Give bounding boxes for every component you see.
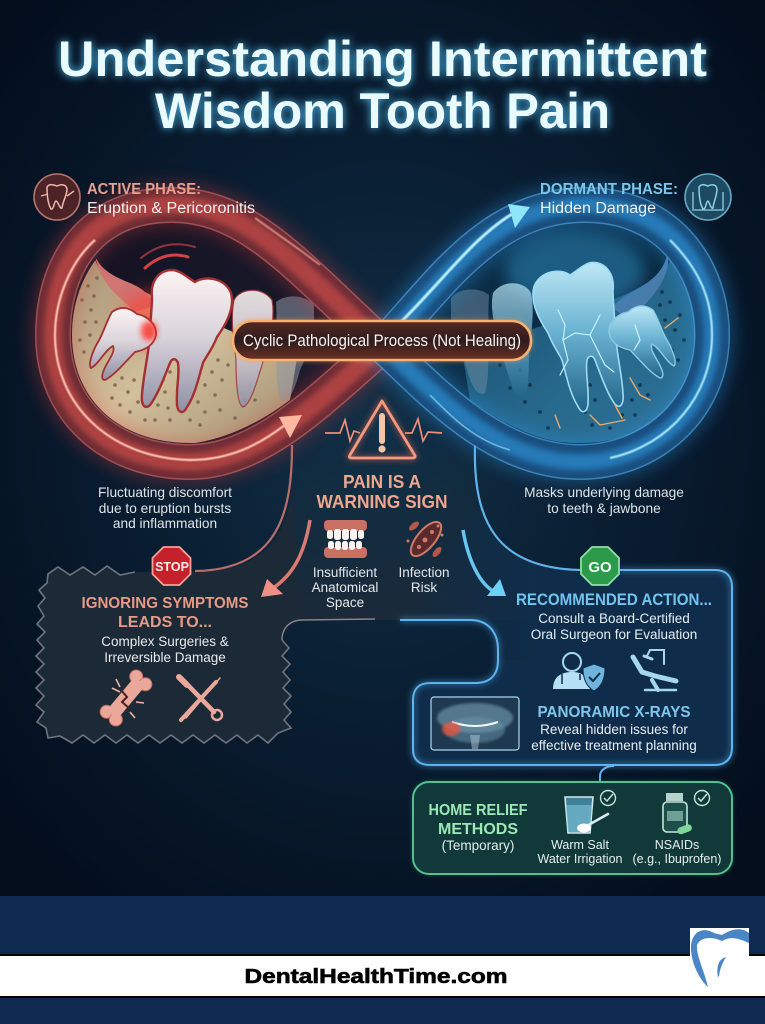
arrow: red loop	[279, 415, 302, 438]
arrow: red to panel	[261, 579, 283, 597]
text: active phase description: due to eruption bursts	[99, 501, 231, 516]
heading: recommended action: RECOMMENDED ACTION...	[516, 591, 712, 609]
header: dormant phase	[540, 174, 731, 220]
text: insufficient anatomical space	[312, 565, 378, 610]
tooth: second molar	[492, 283, 533, 400]
icon: dentures	[324, 520, 367, 558]
illustration: left teeth	[72, 223, 337, 443]
heading: ignoring symptoms: IGNORING SYMPTOMS	[82, 595, 249, 612]
illustration: right teeth	[436, 223, 695, 443]
header: active phase: Eruption & Pericoronitis	[87, 200, 255, 217]
cracks	[555, 310, 678, 428]
text: consult surgeon: Oral Surgeon for Evaluation	[531, 627, 697, 642]
icon: dormant tooth	[685, 174, 731, 220]
text: infection risk: Infection	[398, 565, 450, 580]
heading: ignoring symptoms	[82, 595, 249, 631]
icon: active tooth	[34, 174, 80, 220]
text: dormant phase description: to teeth & jawbone	[547, 501, 661, 516]
heading: home relief: (Temporary)	[442, 838, 514, 853]
text: active phase description: and inflammation	[113, 516, 217, 531]
heading: home relief	[428, 802, 528, 853]
title: Understanding Intermittent	[58, 31, 707, 87]
icon: stop sign	[152, 547, 190, 585]
text: insufficient anatomical space: Anatomical	[312, 580, 378, 595]
text: warm salt water: Water Irrigation	[538, 852, 623, 866]
text: complex surgeries	[101, 634, 229, 665]
tooth: impacted wisdom tooth	[609, 306, 675, 378]
footer: website banner: DentalHealthTime.com	[244, 966, 508, 988]
text: insufficient anatomical space: Insufficient	[313, 565, 377, 580]
centre glow zone	[292, 440, 585, 620]
title	[58, 31, 707, 139]
pain waves	[141, 244, 195, 268]
tooth: impacted wisdom tooth	[90, 308, 156, 380]
icon: dental chair	[633, 650, 676, 690]
tooth: second molar	[232, 290, 273, 407]
arrow: blue to panel	[487, 579, 506, 596]
text: consult surgeon: Consult a Board-Certified	[538, 611, 690, 626]
infinity loop: red band	[53, 205, 383, 462]
panel: home relief methods	[413, 766, 732, 874]
text: warm salt water: Warm Salt	[551, 838, 609, 852]
heading: pain is a warning sign: PAIN IS A	[343, 472, 421, 492]
text: infection risk	[398, 565, 450, 595]
tooth: large molar with cracks	[533, 262, 623, 412]
heading: ignoring symptoms: LEADS TO...	[118, 614, 212, 631]
icon: surgical tools	[179, 677, 222, 720]
heading: home relief: METHODS	[438, 821, 518, 838]
title: Wisdom Tooth Pain	[155, 83, 610, 139]
logo: tooth	[690, 928, 749, 987]
text: nsaids: (e.g., Ibuprofen)	[633, 852, 721, 866]
label: cyclic process pill	[232, 320, 532, 361]
footer: website banner	[0, 954, 765, 998]
footer: navy band	[0, 896, 765, 1024]
icon: go sign	[581, 547, 619, 585]
text: nsaids	[633, 838, 721, 866]
text: dormant phase description	[524, 485, 684, 516]
connector: red lines	[195, 445, 375, 640]
icon: broken bone	[97, 667, 155, 729]
icon: bacteria	[406, 517, 446, 561]
text: complex surgeries: Complex Surgeries &	[101, 634, 229, 649]
header: active phase: ACTIVE PHASE:	[87, 181, 201, 198]
tooth: large molar	[142, 270, 232, 412]
header: active phase	[34, 174, 255, 220]
heading: pain is a warning sign	[316, 472, 448, 512]
header: dormant phase: Hidden Damage	[540, 200, 656, 217]
text: active phase description	[98, 485, 232, 531]
title: Understanding Intermittent	[58, 31, 707, 87]
icon: inflammation spot	[141, 321, 157, 341]
title: Wisdom Tooth Pain	[155, 83, 610, 139]
text: dormant phase description: Masks underlying damage	[524, 485, 684, 500]
icon: go sign: GO	[588, 559, 612, 576]
connector: blue lines	[463, 445, 585, 596]
heading: pain is a warning sign: WARNING SIGN	[316, 492, 448, 512]
icon: doctor with shield	[553, 653, 605, 691]
header: dormant phase: DORMANT PHASE:	[540, 181, 678, 198]
text: nsaids: NSAIDs	[655, 838, 699, 852]
arrow: blue loop	[508, 204, 530, 228]
text: reveal hidden issues: Reveal hidden issues for	[540, 722, 688, 737]
icon: nsaid bottle	[663, 790, 710, 835]
tooth: third molar faded	[451, 289, 489, 394]
tooth: third molar faded	[276, 296, 314, 401]
text: warm salt water	[538, 838, 623, 866]
icon: salt water glass	[565, 790, 616, 833]
label: cyclic process pill: Cyclic Pathological Process (Not Healing)	[243, 332, 521, 350]
text: active phase description: Fluctuating discomfort	[98, 485, 232, 500]
text: consult surgeon	[531, 611, 697, 642]
heading: home relief: HOME RELIEF	[428, 802, 528, 819]
heading: panoramic x-rays: PANORAMIC X-RAYS	[538, 704, 691, 721]
text: insufficient anatomical space: Space	[326, 595, 364, 610]
icon: warning triangle with pulse	[325, 401, 442, 458]
panel: ignoring symptoms	[36, 490, 302, 743]
image: panoramic x-ray	[431, 697, 519, 750]
text: reveal hidden issues: effective treatment planning	[531, 738, 697, 753]
infinity loop: blue band	[383, 204, 712, 462]
text: reveal hidden issues	[531, 722, 697, 753]
text: complex surgeries: Irreversible Damage	[104, 650, 226, 665]
icon: stop sign: STOP	[155, 560, 189, 574]
panel: recommended action	[400, 510, 732, 765]
text: infection risk: Risk	[411, 580, 437, 595]
